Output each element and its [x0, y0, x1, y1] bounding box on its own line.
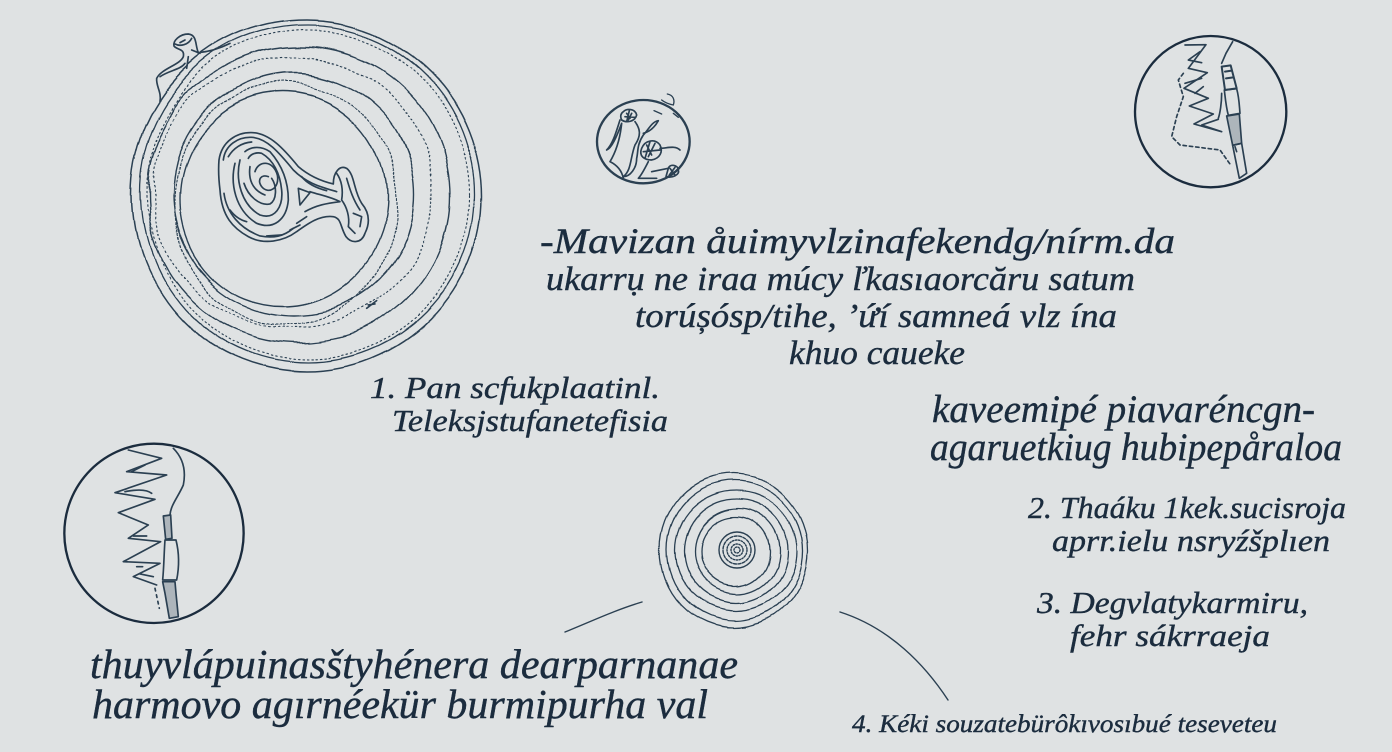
- heading bottom: thuyvlápuinasštyhénera dearparnanae: [90, 641, 738, 687]
- icon: small circle with botanical sketch: [597, 94, 690, 183]
- inner wavy rings: [148, 47, 450, 343]
- rings of small illustration: [660, 474, 808, 628]
- list item 2: aprr.ielu nsryźšplıen: [1052, 523, 1330, 558]
- zigzag line: [1184, 45, 1222, 132]
- centre rosette: [719, 532, 755, 568]
- neck curve: [170, 448, 184, 515]
- heading right: kaveemipé piavaréncgn-: [932, 388, 1315, 431]
- text block: main paragraph: ukarrụ ne iraa múcy ľkasıaorcăru satum: [546, 261, 1135, 298]
- tube: [1222, 65, 1237, 90]
- icon: circle with zigzag and tube, bottom left: [64, 444, 244, 623]
- list item 3: 3. Degvlatykarmiru,: [1036, 585, 1308, 620]
- illustration: large concentric rings with keyhole shape: [132, 20, 482, 372]
- list item 2: [1028, 490, 1346, 558]
- text block: main paragraph: [540, 221, 1175, 372]
- list item 2: 2. Thaáku 1kek.sucisroja: [1028, 490, 1346, 525]
- knob at top left of large ring: [157, 34, 377, 308]
- heading right: agaruetkiug hubipepåraloa: [930, 426, 1342, 469]
- illustration: small concentric rings: [660, 474, 808, 628]
- heading bottom: [90, 641, 738, 727]
- list item 3: fehr sákrraeja: [1070, 618, 1270, 653]
- innermost ring: [180, 93, 386, 305]
- heading right: [930, 388, 1342, 469]
- connector line right: [840, 612, 948, 700]
- connector line left: [565, 602, 642, 632]
- text block: main paragraph: -Mavizan åuimyvlzinafekendg/nírm.da: [540, 221, 1175, 261]
- text block: main paragraph: khuo caueke: [789, 335, 965, 372]
- list item 3: [1036, 585, 1308, 653]
- list item 1: [370, 370, 668, 438]
- list item 1: Teleksjstufanetefisia: [392, 403, 668, 438]
- tube: [163, 515, 172, 539]
- heading bottom: harmovo agırnéekür burmipurha val: [92, 681, 708, 727]
- icon: circle with zigzag and tube, top right: [1135, 36, 1286, 187]
- keyhole spiral shape: [219, 133, 368, 242]
- outer smooth rings: [132, 20, 482, 372]
- text block: main paragraph: torúșósp/tihe, ’ứí samneá vlz ína: [635, 298, 1117, 335]
- zigzag line: [115, 450, 167, 585]
- list item 4: 4. Kéki souzatebürôkıvosıbué teseveteu: [852, 711, 1277, 738]
- dashed outline: [1172, 73, 1231, 165]
- list item 1: 1. Pan scfukplaatinl.: [370, 370, 660, 405]
